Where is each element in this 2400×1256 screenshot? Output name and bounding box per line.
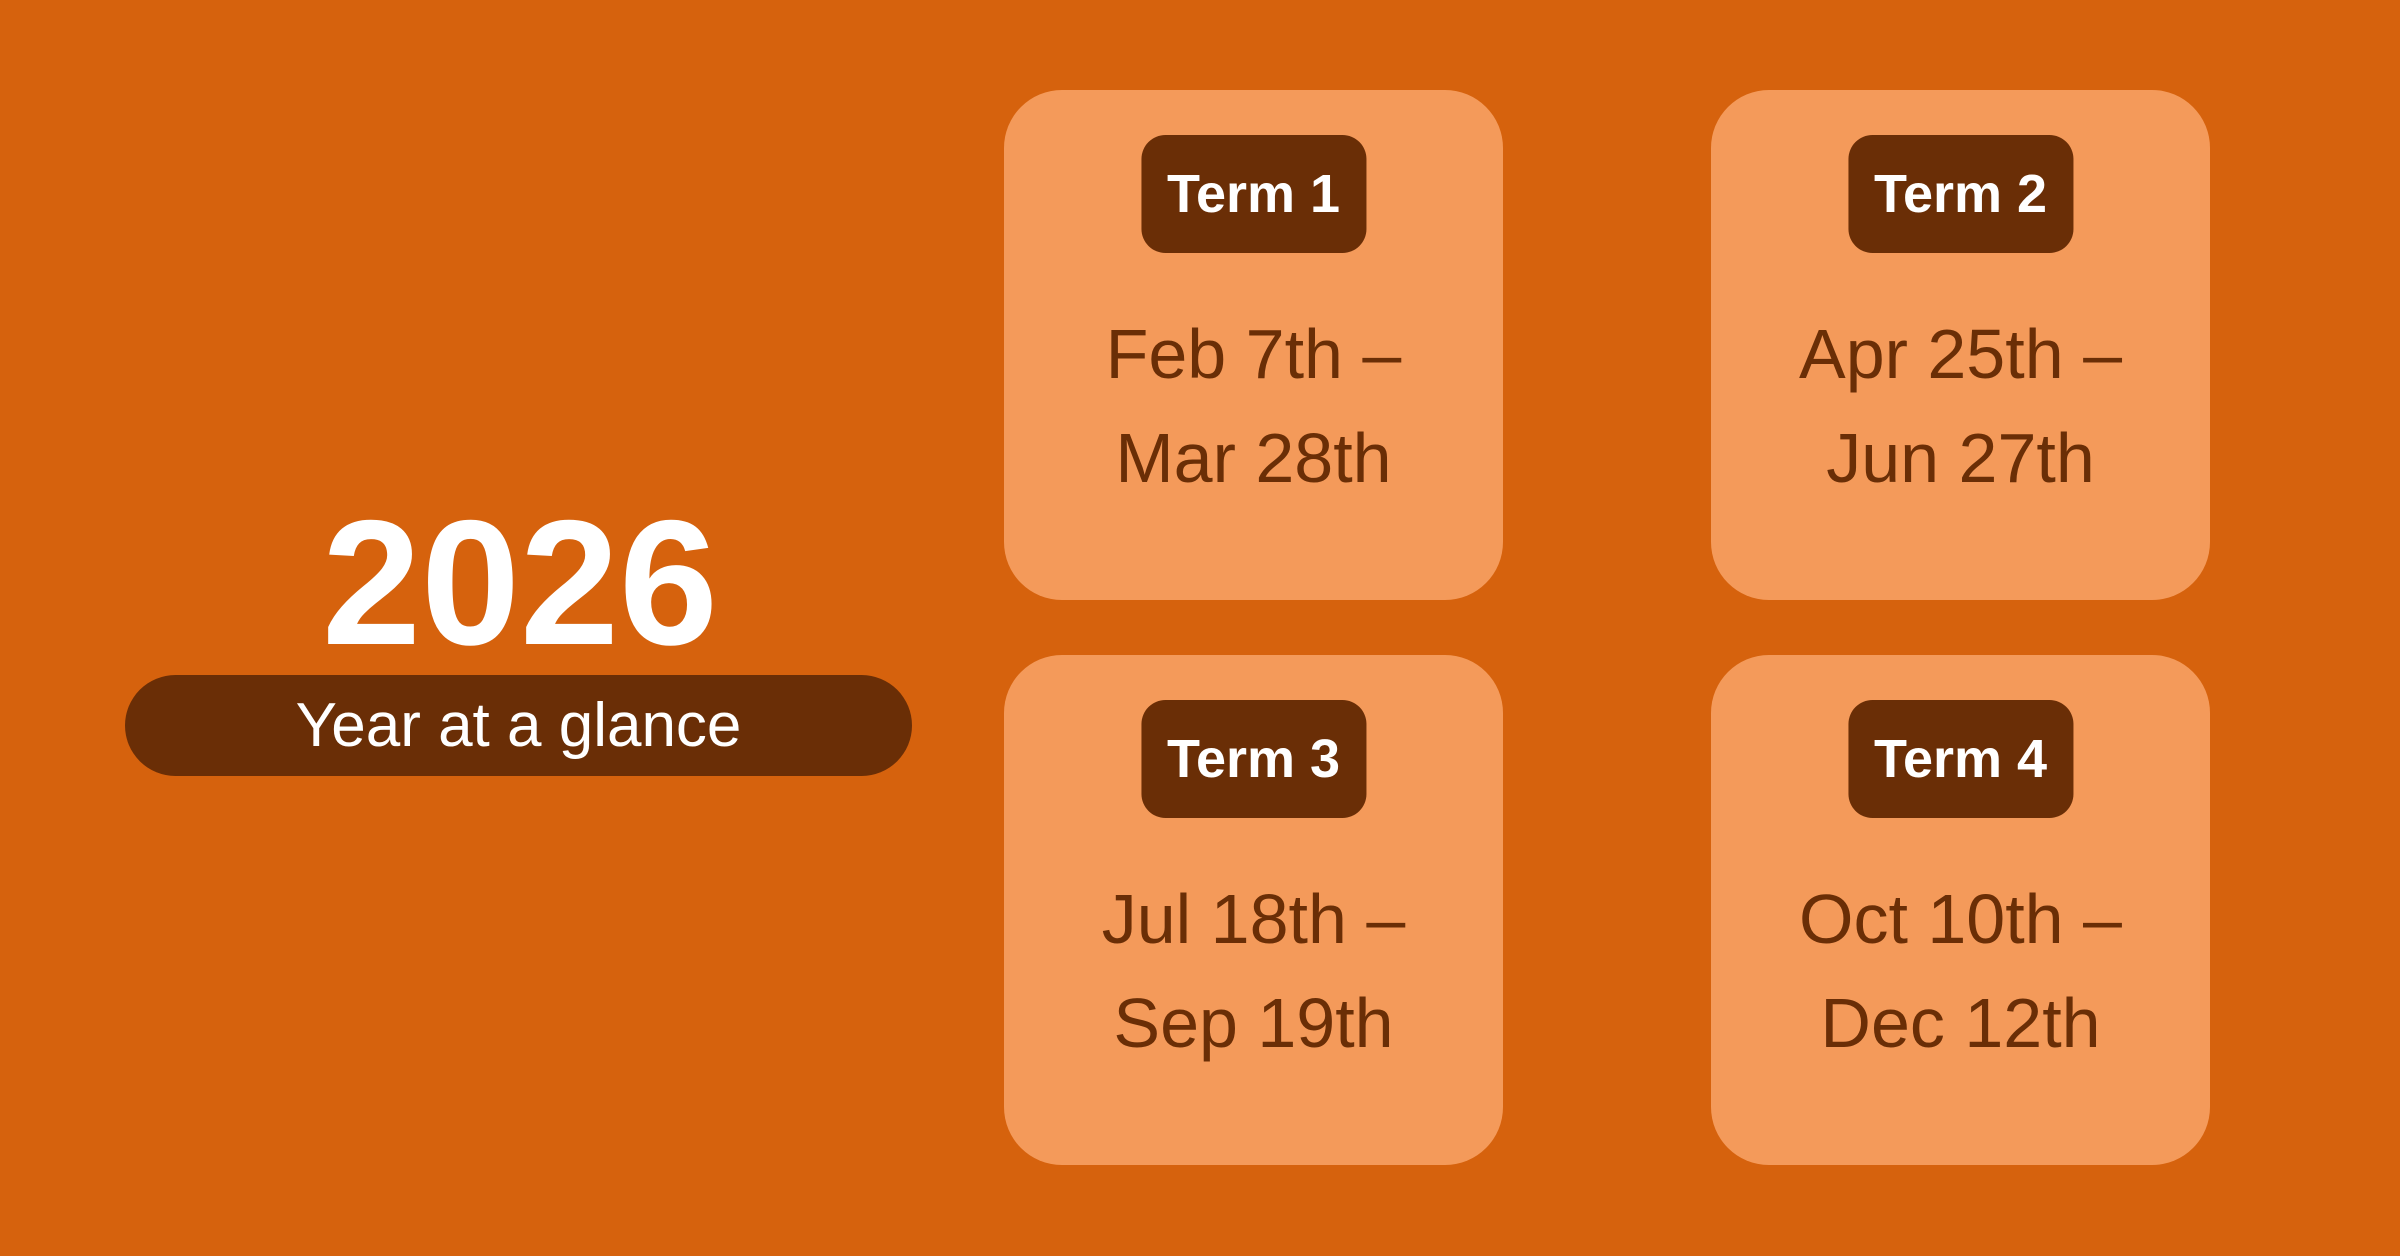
text: term 2 dates xyxy=(1799,315,2122,497)
text: term 4 dates: Dec 12th xyxy=(1820,984,2101,1062)
pill: Year at a glance xyxy=(125,675,912,776)
text: term 1 dates: Mar 28th xyxy=(1115,419,1392,497)
text: term 2 dates: Jun 27th xyxy=(1826,419,2095,497)
panel: term 1 xyxy=(1004,90,1503,600)
badge: Term 1: Term 1 xyxy=(1167,164,1340,224)
text: term 3 dates: Sep 19th xyxy=(1113,984,1394,1062)
badge: Term 4: Term 4 xyxy=(1874,729,2047,789)
pill: Year at a glance: Year at a glance xyxy=(296,691,741,760)
panel: term 2 xyxy=(1711,90,2210,600)
badge: Term 3 xyxy=(1141,700,1366,818)
badge: Term 2 xyxy=(1848,135,2073,253)
badge: Term 2: Term 2 xyxy=(1874,164,2047,224)
text: term 4 dates: Oct 10th – xyxy=(1799,880,2122,958)
heading: 2026: 2026 xyxy=(322,483,718,682)
text: term 3 dates xyxy=(1102,880,1406,1062)
panel: term 4 xyxy=(1711,655,2210,1165)
text: term 2 dates: Apr 25th – xyxy=(1799,315,2122,393)
text: term 1 dates: Feb 7th – xyxy=(1106,315,1401,393)
panel: term 3 xyxy=(1004,655,1503,1165)
badge: Term 1 xyxy=(1141,135,1366,253)
badge: Term 4 xyxy=(1848,700,2073,818)
badge: Term 3: Term 3 xyxy=(1167,729,1340,789)
text: term 1 dates xyxy=(1106,315,1402,497)
text: term 4 dates xyxy=(1799,880,2122,1062)
text: term 3 dates: Jul 18th – xyxy=(1102,880,1405,958)
